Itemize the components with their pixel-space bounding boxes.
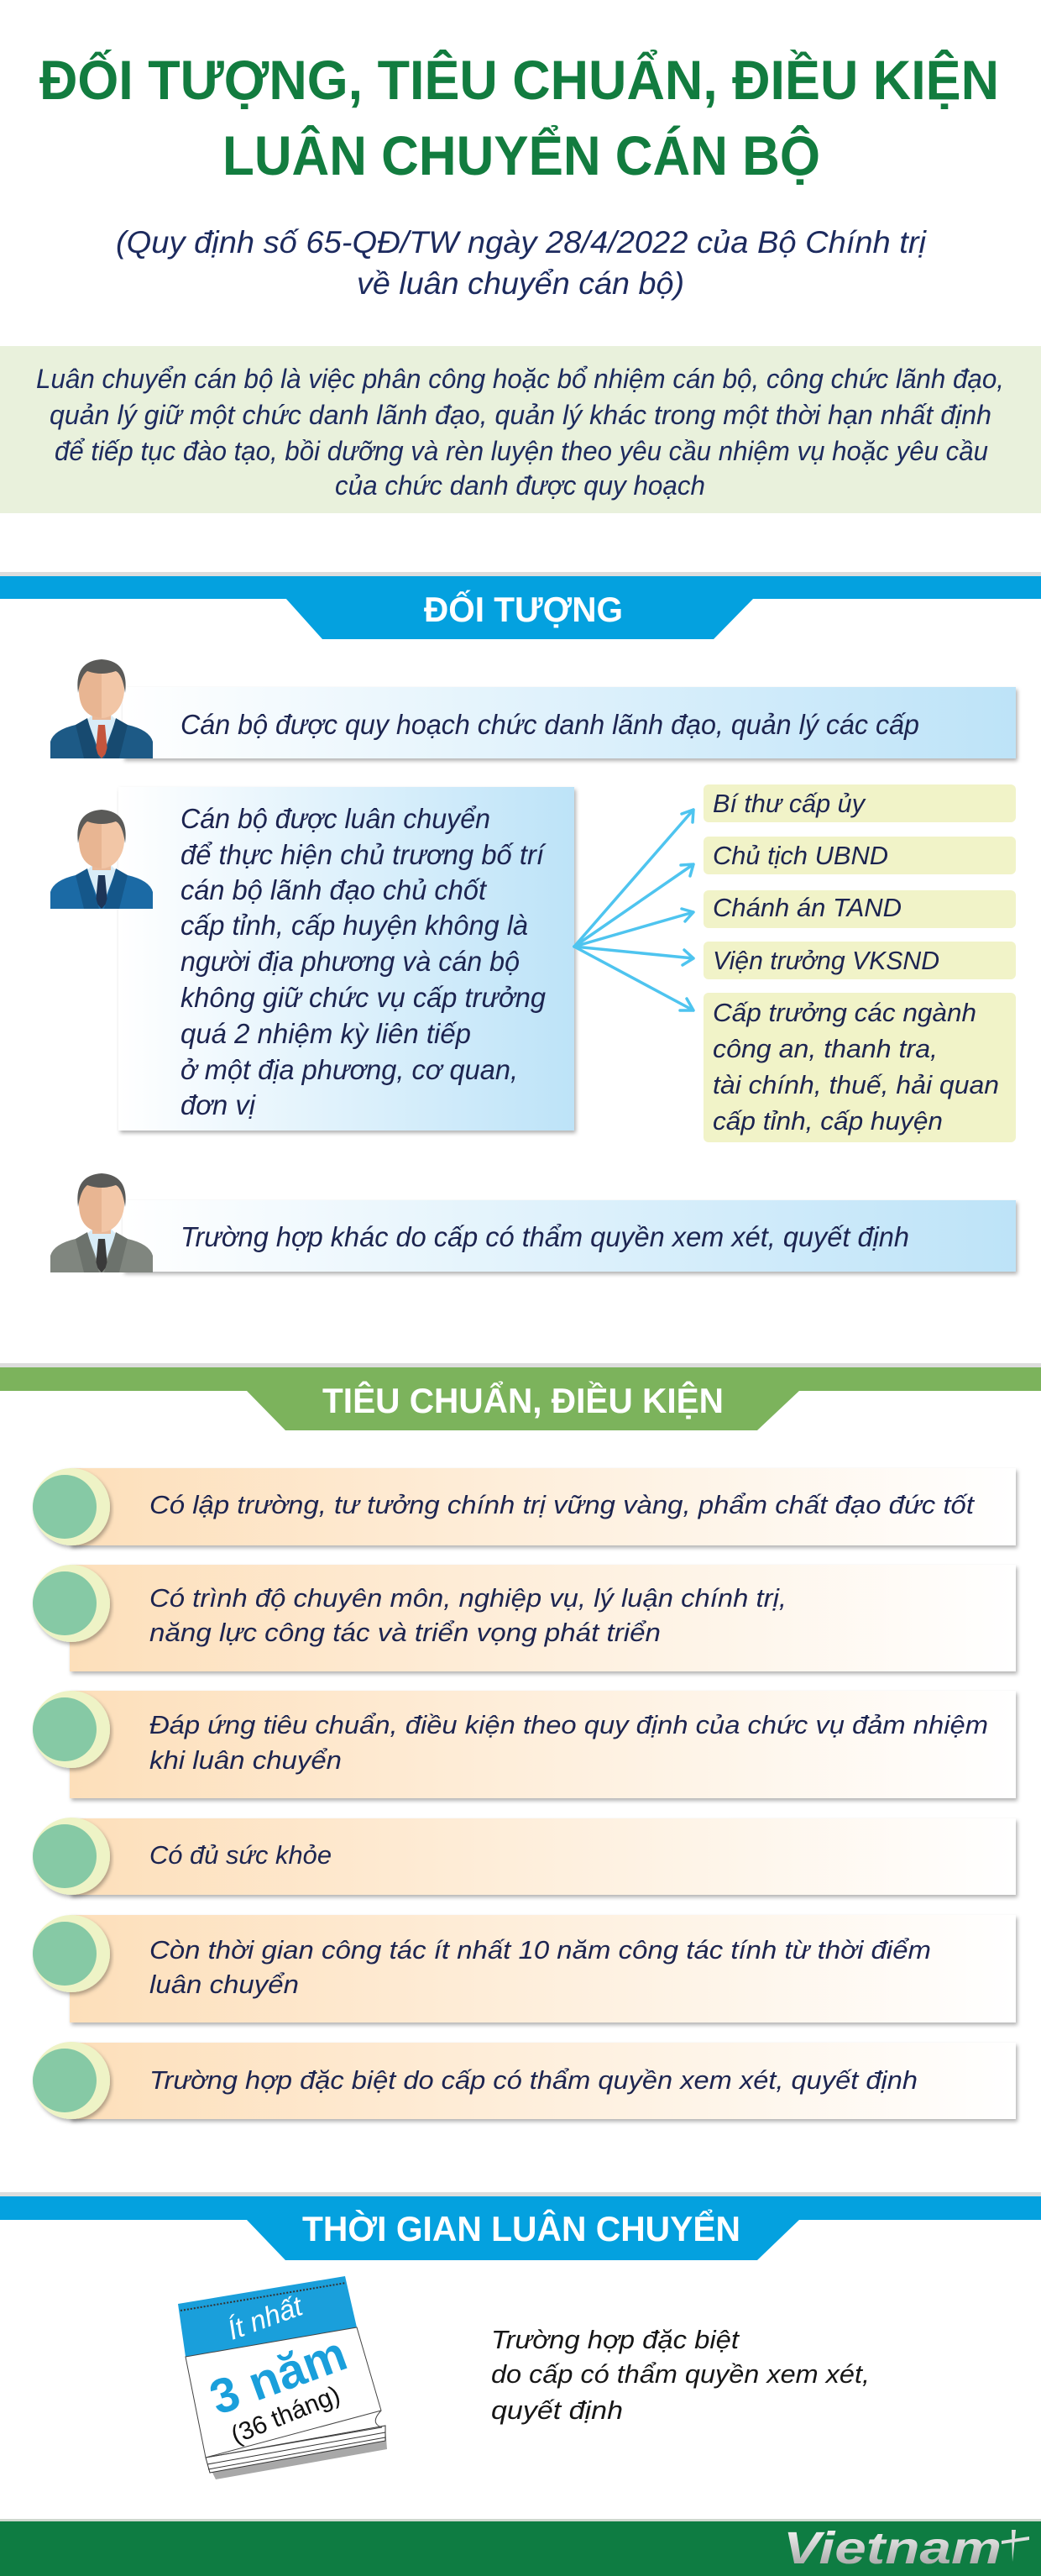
criterion 1 [33, 1468, 1016, 1545]
criterion 2: năng lực công tác và triển vọng phát triển [149, 1618, 661, 1647]
criterion 3: khi luân chuyển [149, 1745, 342, 1775]
intro definition box: để tiếp tục đào tạo, bồi dưỡng và rèn luyện theo yêu cầu nhiệm vụ hoặc yêu cầu [55, 436, 988, 466]
special case note: Trường hợp đặc biệt [491, 2325, 740, 2354]
criterion 6 [33, 2042, 1016, 2119]
subtitle [116, 225, 928, 301]
object 2: rotated cadres box: đơn vị [180, 1089, 257, 1120]
object 2: rotated cadres box: Cán bộ được luân chuyển [180, 803, 490, 834]
positions list: cấp tỉnh, cấp huyện [713, 1106, 943, 1136]
icon: bullet circle [33, 1818, 110, 1895]
object 2: rotated cadres box: cấp tỉnh, cấp huyện không là [180, 910, 528, 941]
intro definition box [0, 346, 1041, 513]
title [39, 49, 999, 186]
positions list: công an, thanh tra, [713, 1034, 938, 1063]
intro definition box: Luân chuyển cán bộ là việc phân công hoặc bổ nhiệm cán bộ, công chức lãnh đạo, [36, 364, 1004, 394]
object 2: rotated cadres box: người địa phương và cán bộ [180, 946, 520, 977]
criterion 2 [33, 1565, 1016, 1671]
criterion 5: Còn thời gian công tác ít nhất 10 năm công tác tính từ thời điểm [149, 1935, 931, 1965]
icon: bullet circle [33, 2042, 110, 2119]
positions list: tài chính, thuế, hải quan [713, 1070, 999, 1099]
footer with logo [0, 2519, 1041, 2576]
criterion 3: Đáp ứng tiêu chuẩn, điều kiện theo quy định của chức vụ đảm nhiệm [149, 1710, 988, 1739]
criterion 4 [33, 1818, 1016, 1895]
icon: person grey suit [50, 1173, 153, 1272]
special case note [491, 2325, 870, 2425]
subtitle: (Quy định số 65-QĐ/TW ngày 28/4/2022 của Bộ Chính trị [116, 225, 928, 260]
title: ĐỐI TƯỢNG, TIÊU CHUẨN, ĐIỀU KIỆN [39, 49, 999, 111]
criterion 3 [33, 1691, 1016, 1798]
icon: calendar 3 years: (36 tháng) [228, 2381, 344, 2449]
special case note: do cấp có thẩm quyền xem xét, [491, 2359, 870, 2389]
object 3: other cases: Trường hợp khác do cấp có thẩm quyền xem xét, quyết định [180, 1221, 909, 1252]
object 2: rotated cadres box: quá 2 nhiệm kỳ liên tiếp [180, 1018, 471, 1049]
special case note: quyết định [491, 2395, 623, 2425]
section header: Thời gian luân chuyển [0, 2192, 1041, 2260]
criterion 5 [33, 1915, 1016, 2023]
icon: person blue suit [50, 810, 153, 909]
object 2: rotated cadres box: ở một địa phương, cơ quan, [180, 1054, 518, 1085]
criterion 2: Có trình độ chuyên môn, nghiệp vụ, lý luận chính trị, [149, 1583, 787, 1613]
section header: Đối tượng [0, 572, 1041, 639]
section header: Thời gian luân chuyển: THỜI GIAN LUÂN CHUYỂN [302, 2208, 740, 2248]
intro definition box: quản lý giữ một chức danh lãnh đạo, quản lý khác trong một thời hạn nhất định [50, 400, 991, 430]
positions list [704, 784, 1016, 1142]
icon: calendar 3 years: Ít nhất [223, 2290, 308, 2346]
positions list: Bí thư cấp ủy [713, 789, 866, 818]
arrows fan [574, 810, 693, 1010]
positions list: Cấp trưởng các ngành [713, 998, 976, 1027]
icon: person dark blue suit [50, 659, 153, 758]
positions list: Chủ tịch UBND [713, 841, 888, 870]
logo: Vietnam+: Vietnam [783, 2523, 1002, 2573]
object 3: other cases [50, 1173, 1016, 1272]
section header: Tiêu chuẩn, điều kiện: TIÊU CHUẨN, ĐIỀU KIỆN [322, 1380, 724, 1420]
object 2: rotated cadres box: cán bộ lãnh đạo chủ chốt [180, 874, 488, 905]
icon: bullet circle [33, 1691, 110, 1768]
object 1: planned cadres [50, 659, 1016, 758]
positions list: Viện trưởng VKSND [713, 946, 939, 975]
section header: Tiêu chuẩn, điều kiện [0, 1363, 1041, 1430]
object 2: rotated cadres box: không giữ chức vụ cấp trưởng [180, 982, 547, 1013]
icon: bullet circle [33, 1468, 110, 1545]
intro definition box: của chức danh được quy hoạch [335, 470, 705, 501]
object 2: rotated cadres box: để thực hiện chủ trương bố trí [180, 839, 547, 870]
object 1: planned cadres: Cán bộ được quy hoạch chức danh lãnh đạo, quản lý các cấp [180, 709, 919, 740]
icon: calendar 3 years [178, 2276, 387, 2479]
positions list: Chánh án TAND [713, 893, 902, 922]
criterion 5: luân chuyển [149, 1970, 299, 1999]
icon: bullet circle [33, 1915, 110, 1992]
criterion 4: Có đủ sức khỏe [149, 1840, 332, 1870]
section header: Đối tượng: ĐỐI TƯỢNG [424, 589, 623, 629]
criterion 6: Trường hợp đặc biệt do cấp có thẩm quyền xem xét, quyết định [149, 2065, 918, 2095]
title: LUÂN CHUYỂN CÁN BỘ [222, 124, 820, 186]
icon: bullet circle [33, 1565, 110, 1642]
object 2: rotated cadres box [50, 787, 574, 1131]
criterion 1: Có lập trường, tư tưởng chính trị vững vàng, phẩm chất đạo đức tốt [149, 1490, 975, 1519]
subtitle: về luân chuyển cán bộ) [357, 266, 684, 301]
icon: calendar 3 years: 3 năm [203, 2326, 353, 2426]
